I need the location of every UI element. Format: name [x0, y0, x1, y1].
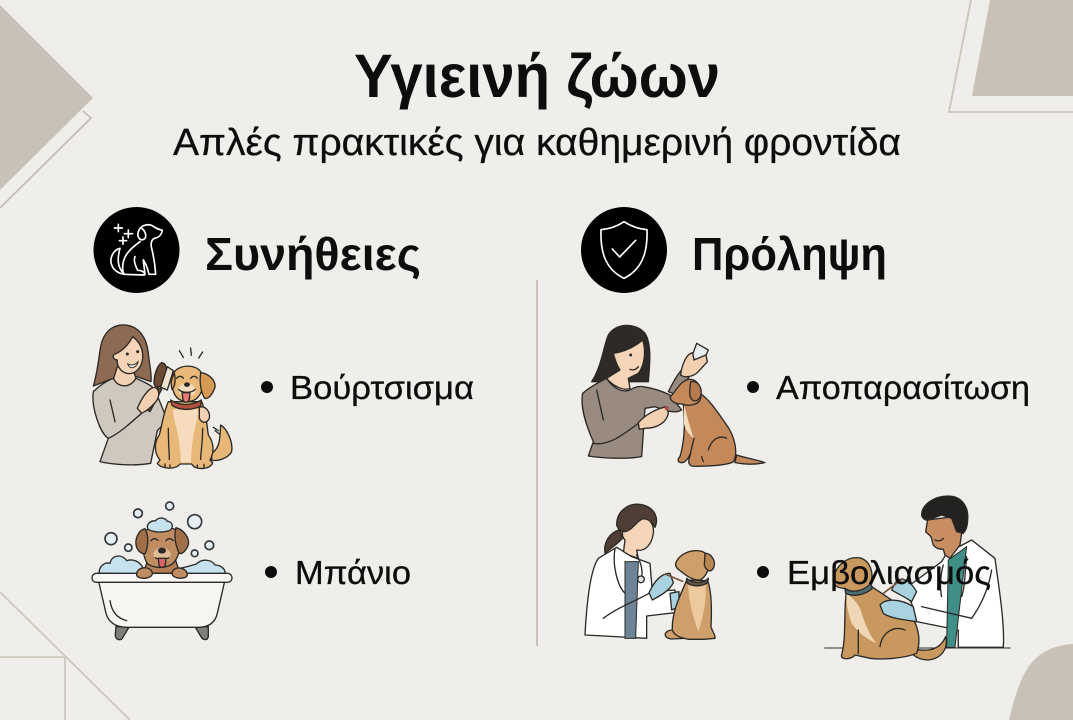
motion marks	[179, 348, 203, 358]
sweater	[582, 378, 682, 458]
hair	[93, 325, 151, 386]
dog	[735, 455, 765, 464]
decoration: top-left diamond	[0, 5, 93, 208]
decoration: bottom-right blob	[1009, 644, 1073, 720]
dog neck	[143, 558, 180, 573]
left vet	[585, 504, 683, 638]
bullet text: Μπάνιο: Μπάνιο	[295, 554, 411, 591]
table line	[824, 646, 1011, 649]
illustration: woman deworming dog	[582, 325, 765, 466]
bullet text: Εμβολιασμός: Εμβολιασμός	[787, 554, 991, 591]
bullet text: Αποπαρασίτωση: Αποπαρασίτωση	[776, 369, 1030, 406]
face	[113, 337, 143, 374]
dog head	[172, 366, 203, 402]
brush	[154, 363, 166, 387]
dog head	[670, 379, 701, 405]
hand	[137, 387, 159, 413]
foam	[99, 556, 143, 574]
icon: shield with check	[581, 207, 667, 293]
illustration: woman brushing dog	[93, 325, 232, 469]
dog head	[142, 527, 180, 567]
dog face	[153, 548, 171, 561]
hair	[592, 325, 650, 382]
bullet text: Βούρτσισμα: Βούρτσισμα	[290, 369, 474, 406]
column divider	[536, 280, 538, 646]
icon: dog with sparkles	[94, 207, 180, 293]
heading: Πρόληψη: Πρόληψη	[692, 228, 887, 280]
chest	[173, 407, 198, 463]
dog collar	[171, 400, 201, 409]
decoration: bottom-left lines	[0, 592, 130, 720]
hand on dog	[199, 407, 210, 422]
syringe bottle	[688, 343, 708, 372]
raised arm	[668, 370, 692, 395]
raised hand	[681, 353, 707, 377]
bubbles	[105, 502, 214, 557]
subtitle: Απλές πρακτικές για καθημερινή φροντίδα	[173, 122, 901, 164]
dog tail	[212, 425, 232, 460]
face	[607, 340, 645, 389]
right dog	[833, 558, 946, 660]
decoration: top-right trapezoid	[949, 0, 1073, 112]
dog body	[155, 402, 213, 469]
wag marks	[213, 427, 219, 434]
left dog	[665, 551, 715, 639]
dog muzzle and tongue	[178, 383, 196, 396]
head foam	[147, 518, 172, 532]
illustration: dog in bathtub	[92, 502, 232, 640]
title: Υγιεινή ζώων	[354, 42, 720, 110]
lower hand	[638, 407, 668, 429]
right vet	[883, 496, 1004, 647]
illustration: two vets vaccinating dogs	[585, 496, 1011, 660]
sweater	[93, 378, 167, 465]
tub	[115, 627, 129, 640]
heading: Συνήθειες: Συνήθειες	[205, 228, 421, 280]
paws	[137, 568, 152, 578]
neck	[113, 367, 136, 386]
